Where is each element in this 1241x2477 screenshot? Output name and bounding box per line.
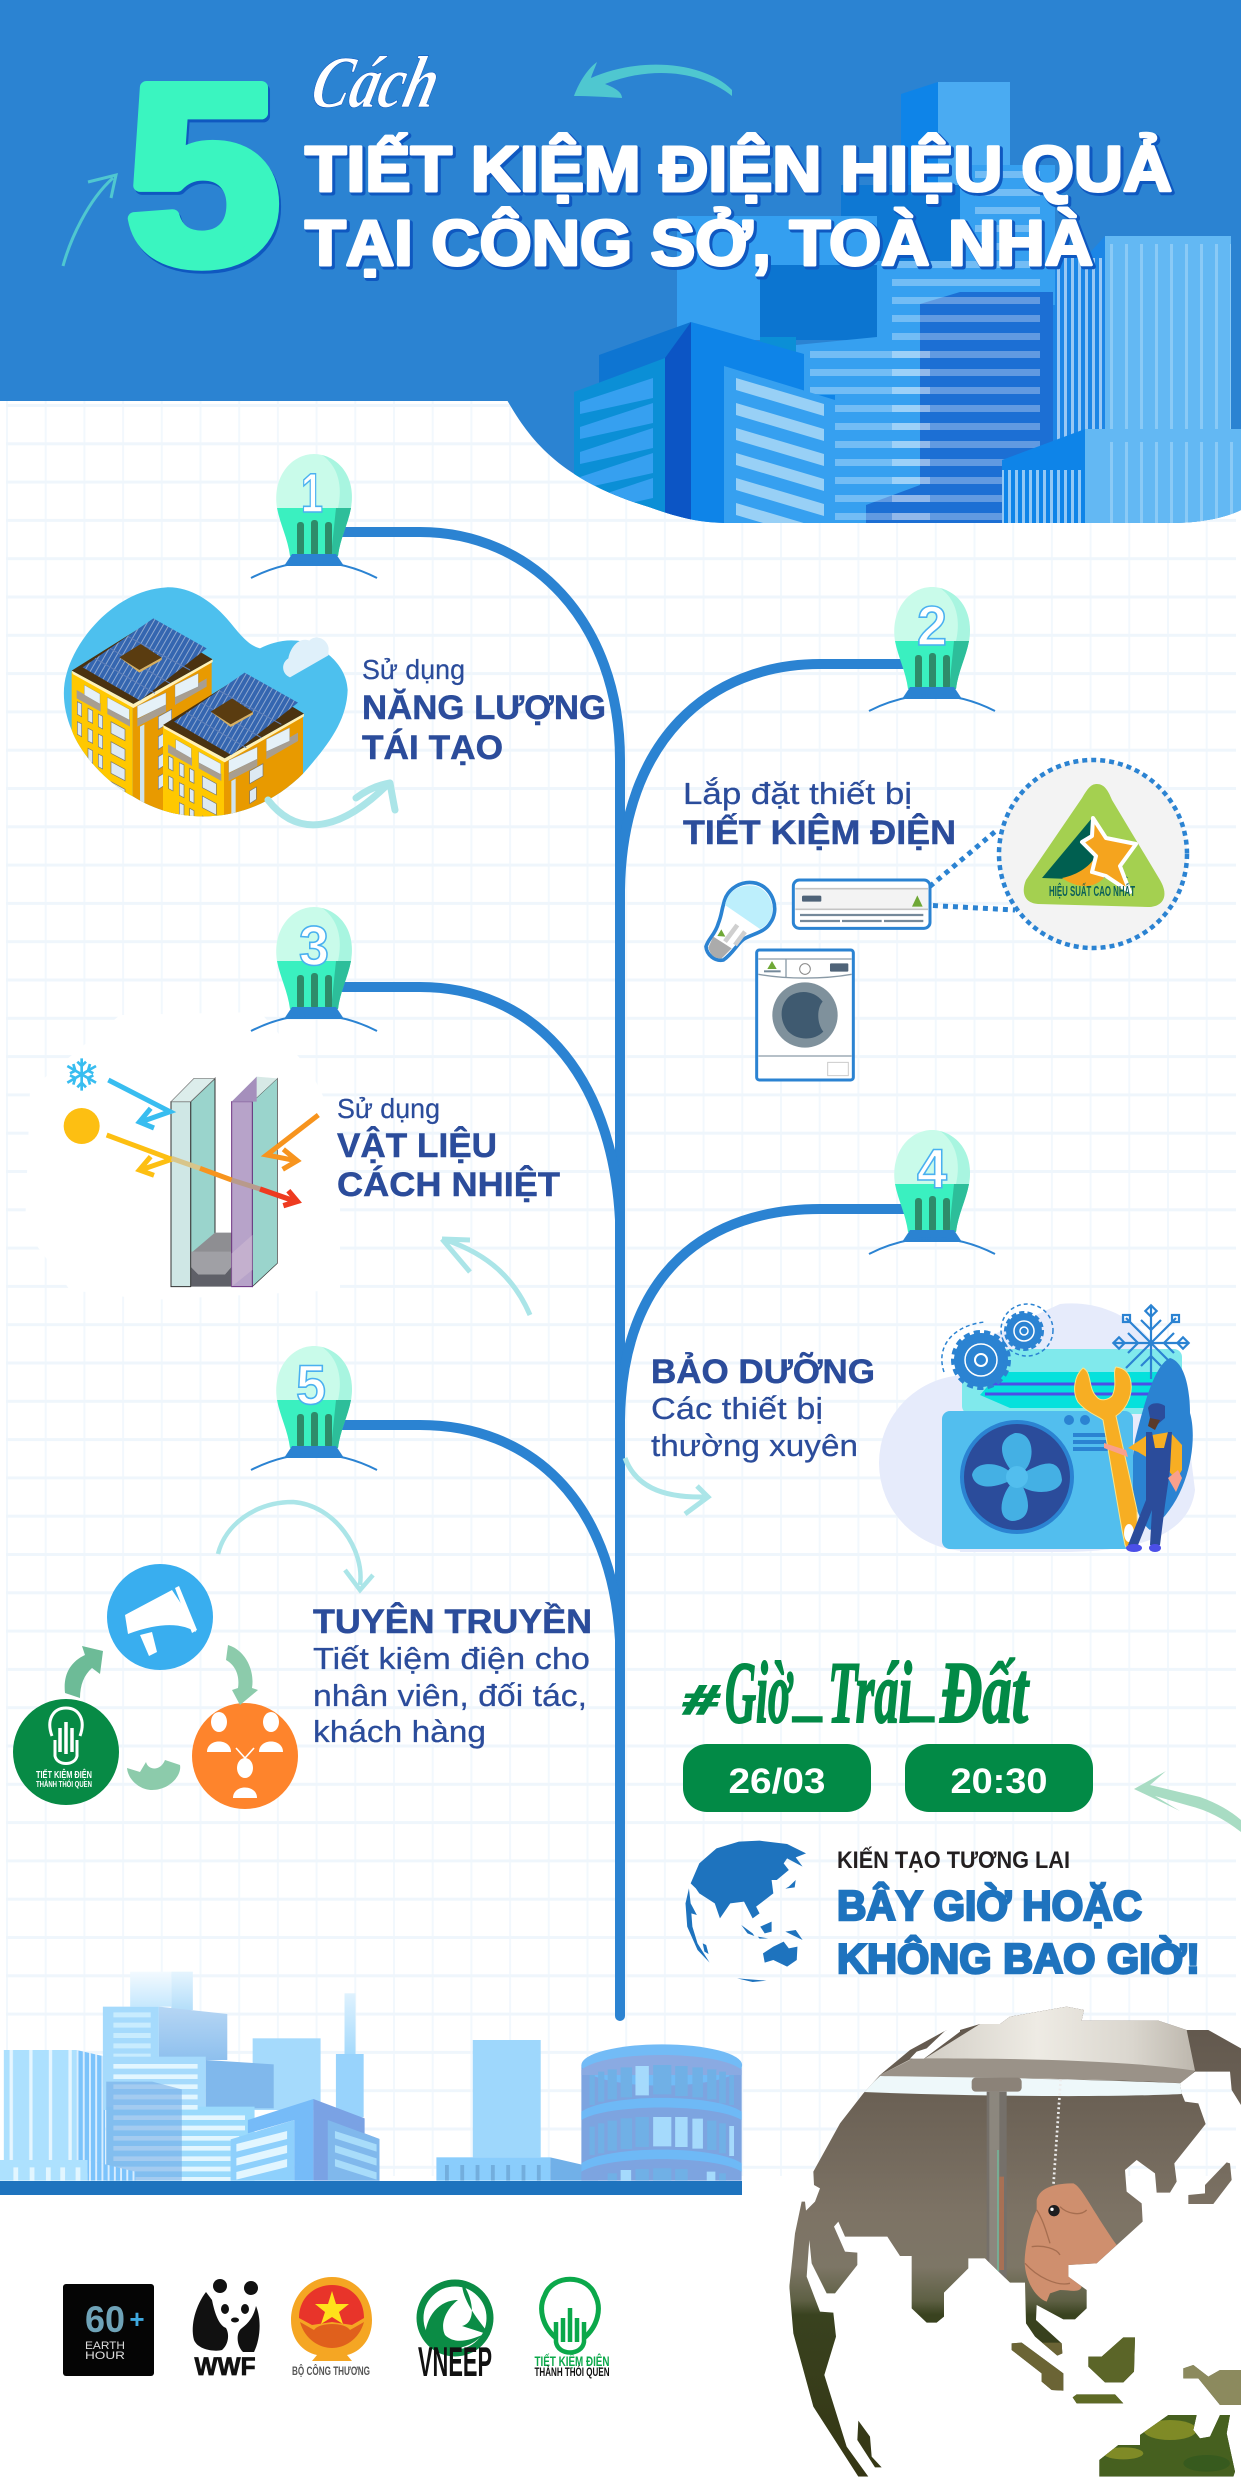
hashtag: _	[906, 1660, 937, 1726]
heading: Cách: Cách	[304, 42, 448, 124]
logo: Tiết kiệm điện thành thói quen: THÀNH THÓI QUEN	[534, 2366, 610, 2379]
slogan: BÂY GIỜ HOẶC	[837, 1881, 1142, 1929]
icon: people network	[192, 1703, 298, 1809]
logo: Bộ Công Thương: BỘ CÔNG THƯƠNG	[292, 2363, 370, 2378]
photo globe	[780, 2000, 1241, 2477]
hashtag: Đất	[939, 1645, 1030, 1742]
hashtag: _	[792, 1660, 825, 1726]
icon: snowflake	[67, 1058, 96, 1091]
bulb 2	[869, 587, 995, 711]
logo: Tiết kiệm điện thành thói quen: TIẾT KIỆM ĐIỆN	[534, 2352, 610, 2369]
logo: WWF: WWF	[194, 2353, 256, 2381]
logo: Earth Hour 60+: EARTH	[85, 2340, 125, 2352]
bulb 2: 2	[917, 594, 947, 657]
text block 2: Lắp đặt thiết bị	[683, 776, 912, 811]
arrow: header top	[574, 62, 732, 98]
dotted connector lines	[922, 830, 1015, 910]
logo: WWF	[193, 2279, 260, 2381]
text block 1: NĂNG LƯỢNG	[362, 689, 606, 727]
icon: gears	[942, 1304, 1053, 1387]
title line 2: TẠI CÔNG SỞ, TOÀ NHÀ	[305, 206, 1093, 279]
text block 5: Tiết kiệm điện cho	[313, 1641, 590, 1676]
hashtag: #	[682, 1678, 720, 1724]
slogan: KHÔNG BAO GIỜ!	[837, 1934, 1200, 1982]
arrow: maintenance	[625, 1458, 708, 1514]
illustration: washing machine	[757, 950, 853, 1080]
title line 1: TIẾT KIỆM ĐIỆN HIỆU QUẢ	[307, 134, 1174, 207]
icon: leaf	[1132, 1358, 1193, 1530]
logo: Bộ Công Thương	[291, 2277, 372, 2378]
bulb 1	[251, 454, 377, 578]
illustration: air conditioner	[793, 880, 930, 928]
time pill	[905, 1744, 1093, 1812]
text block 3: CÁCH NHIỆT	[337, 1166, 560, 1204]
icon: sun	[64, 1108, 100, 1144]
slogan: KIẾN TẠO TƯƠNG LAI	[837, 1846, 1070, 1874]
cycle arrows	[65, 1646, 103, 1698]
text block 4: Các thiết bị	[651, 1391, 823, 1426]
logo: Earth Hour 60+: +	[129, 2304, 145, 2334]
arrow: outreach	[218, 1502, 373, 1590]
bulb 4	[869, 1130, 995, 1254]
illustration: solar buildings	[64, 587, 348, 816]
text block 1: TÁI TẠO	[362, 729, 503, 767]
logo: VNEEP: VNEEP	[418, 2338, 492, 2385]
bulb 5	[251, 1346, 377, 1470]
logo: Earth Hour 60+: HOUR	[85, 2350, 125, 2362]
text block 5: nhân viên, đối tác,	[313, 1678, 587, 1713]
text block 5	[313, 1603, 592, 1749]
text block 4	[651, 1353, 875, 1463]
icon: blue globe	[685, 1841, 806, 1982]
icon: snowflake	[1113, 1305, 1189, 1379]
panel: white backdrop of glass illustration	[25, 1012, 340, 1300]
hashtag: Giờ	[725, 1645, 793, 1742]
slogan	[837, 1846, 1200, 1982]
bulb 5: 5	[296, 1353, 326, 1416]
icon: worker	[1104, 1403, 1182, 1552]
white footer	[0, 2195, 760, 2477]
text block 1	[362, 654, 606, 767]
text block 2: TIẾT KIỆM ĐIỆN	[683, 814, 956, 852]
header panel	[0, 0, 1241, 541]
icon: wrench	[1075, 1367, 1138, 1551]
arrow: header left	[63, 175, 116, 266]
title line 1: TIẾT KIỆM ĐIỆN HIỆU QUẢ	[305, 132, 1172, 205]
icon: megaphone	[107, 1564, 213, 1670]
bottom city skyline	[0, 1972, 742, 2181]
text block 1: Sử dụng	[362, 654, 465, 685]
title line 2: TẠI CÔNG SỞ, TOÀ NHÀ	[307, 208, 1095, 281]
text block 3: VẬT LIỆU	[337, 1127, 497, 1165]
text block 5: TUYÊN TRUYỀN	[313, 1603, 592, 1641]
text block 2	[683, 776, 956, 852]
arrow: solar	[268, 783, 395, 825]
header city skyline	[574, 82, 1241, 541]
logo: VNEEP	[418, 2283, 492, 2385]
bulb 1: 1	[301, 461, 323, 524]
big number 5 shadow: 5	[128, 36, 282, 319]
arrow: glass	[442, 1239, 530, 1315]
illustration: LED bulb	[706, 883, 775, 960]
illustration: air conditioner maintenance	[879, 1303, 1195, 1552]
illustration: efficiency badge	[999, 760, 1187, 948]
date pill	[683, 1744, 871, 1812]
date pill: 26/03	[728, 1762, 826, 1801]
text block 3	[337, 1093, 560, 1204]
icon: habit logo: TIẾT KIỆM ĐIỆN	[36, 1768, 92, 1781]
text block 3: Sử dụng	[337, 1093, 440, 1124]
bulb 4: 4	[917, 1137, 947, 1200]
hashtag: Trái	[828, 1645, 912, 1742]
icon: habit logo: THÀNH THÓI QUEN	[36, 1778, 92, 1789]
illustration: efficiency badge: HIỆU SUẤT CAO NHẤT	[1049, 882, 1135, 900]
illustration: outreach cycle	[13, 1564, 298, 1809]
big number 5: 5	[126, 33, 280, 316]
bulb 3: 3	[299, 914, 329, 977]
city ground bar	[0, 2181, 742, 2195]
logo: Earth Hour 60+	[63, 2284, 154, 2376]
cloud	[283, 637, 329, 677]
illustration: insulating glass	[64, 1058, 318, 1287]
icon: habit logo	[13, 1699, 119, 1805]
trunk and branches	[336, 532, 910, 2016]
text block 4: BẢO DƯỠNG	[651, 1353, 875, 1391]
text block 4: thường xuyên	[651, 1428, 858, 1463]
text block 5: khách hàng	[313, 1714, 486, 1749]
arrow: hashtag	[1134, 1771, 1241, 1832]
bulb 3	[251, 907, 377, 1031]
hashtag	[682, 1645, 1030, 1742]
logo: Tiết kiệm điện thành thói quen	[534, 2279, 610, 2379]
time pill: 20:30	[950, 1762, 1048, 1801]
arrows through glass	[108, 1080, 170, 1128]
logo: Earth Hour 60+: 60	[85, 2299, 125, 2340]
